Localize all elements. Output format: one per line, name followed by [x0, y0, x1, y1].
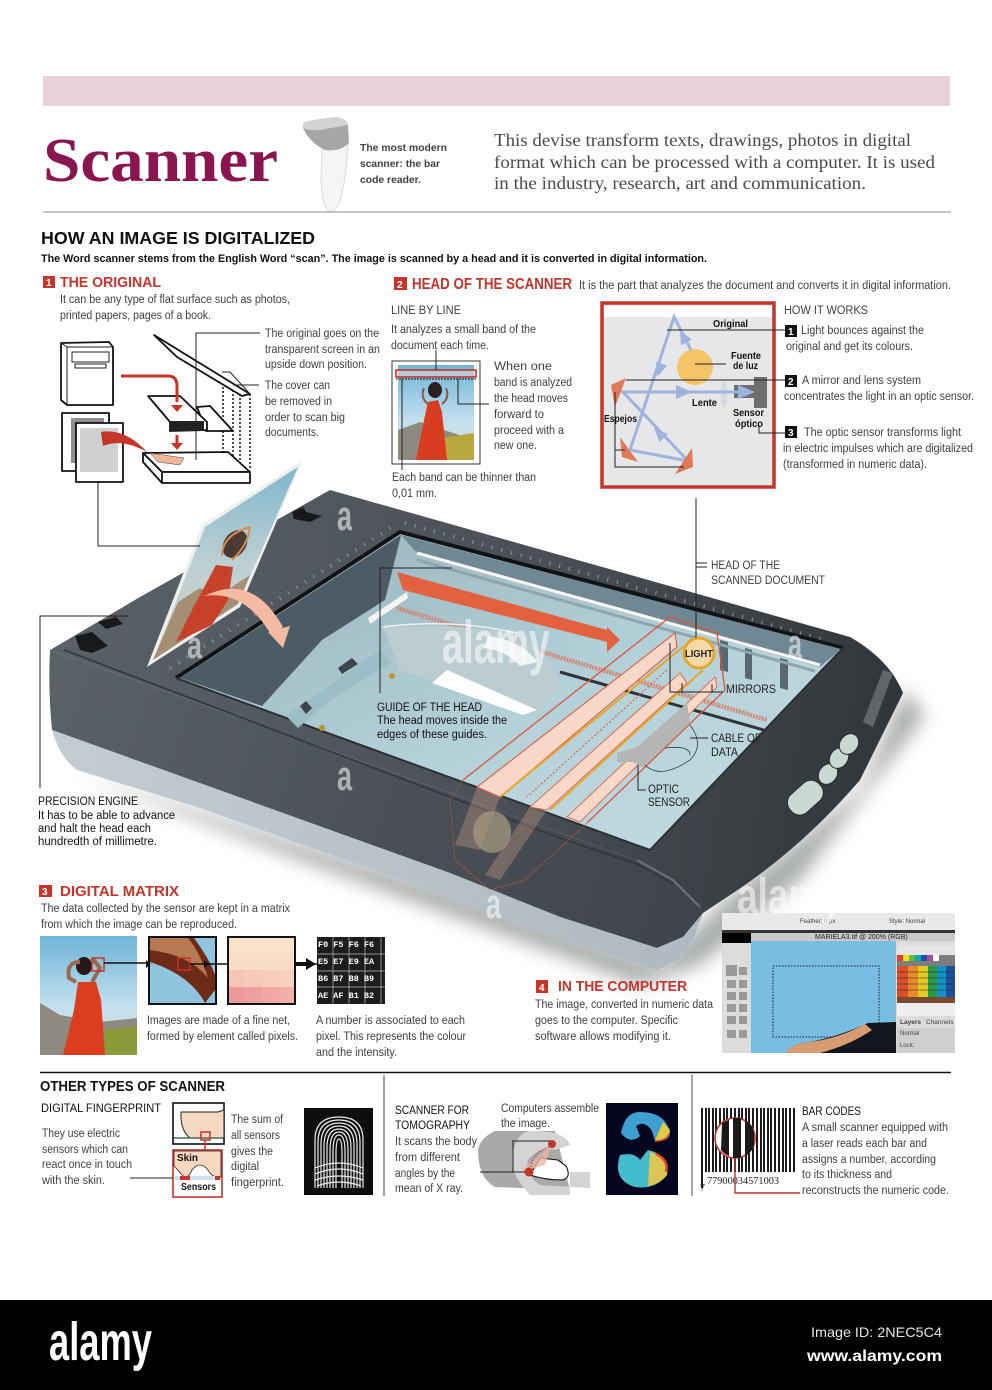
- leader: original to sheet: [98, 482, 200, 546]
- band notes: new one.: [494, 440, 537, 452]
- watermarks: a: [486, 880, 501, 927]
- heading: other types of scanner: OTHER TYPES OF SCANNER: [40, 1079, 225, 1095]
- line by line text: LINE BY LINE: [391, 305, 461, 317]
- panel: scanner photograph: [49, 490, 925, 985]
- how it works text: Light bounces against the: [801, 325, 924, 337]
- barcode graphic: 77900034571003: [707, 1176, 779, 1187]
- pixel captions: formed by element called pixels.: [147, 1031, 298, 1043]
- panel: tomography: [395, 1103, 678, 1195]
- sum text: digital: [231, 1161, 259, 1173]
- line by line text: It analyzes a small band of the: [391, 324, 536, 336]
- heading: how an image is digitalized: The Word scanner stems from the English Word “scan”. The image is scanned by a head and it is converted in digital information.: [41, 253, 707, 265]
- labels: Lente: [692, 398, 717, 409]
- tomography text: [395, 1103, 599, 1195]
- labels: [604, 319, 764, 430]
- fingerprint text: [41, 1103, 161, 1187]
- light beams: [450, 617, 725, 890]
- software screenshot: Style: Normal: [889, 919, 925, 925]
- intro text: This devise transform texts, drawings, photos in digital: [494, 130, 911, 150]
- thumbnail with scan band: [392, 350, 489, 470]
- band notes: the head moves: [494, 393, 568, 405]
- labels: óptico: [735, 419, 763, 430]
- callout: optic sensor: OPTIC: [648, 784, 679, 796]
- description: The image, converted in numeric data: [535, 999, 714, 1011]
- buttons: [783, 730, 863, 820]
- watermarks: alamy: [737, 868, 842, 924]
- intro text: format which can be processed with a computer. It is used: [494, 152, 935, 172]
- callout: light: LIGHT: [685, 649, 713, 660]
- how it works text: (transformed in numeric data).: [783, 459, 927, 471]
- pixel captions: and the intensity.: [316, 1047, 397, 1059]
- how it works text: [783, 305, 974, 471]
- peach curved arrow: [205, 589, 283, 636]
- callout: head of the scanned document: SCANNED DOCUMENT: [711, 575, 825, 587]
- line by line text: [391, 305, 536, 352]
- panel: bar codes: [700, 1106, 949, 1197]
- sensors box: Sensors: [181, 1182, 216, 1193]
- description: software allows modifying it.: [535, 1031, 671, 1043]
- tomography text: Computers assemble: [501, 1103, 599, 1115]
- diagram: light path: [602, 303, 787, 487]
- title: Scanner: [43, 127, 278, 195]
- hex matrix: B6 B7 B8 B9: [318, 974, 374, 984]
- badge 2: 2: [397, 280, 403, 291]
- watermarks: a: [788, 620, 802, 667]
- optic sensor block: [617, 703, 690, 768]
- band notes: [392, 361, 572, 500]
- watermarks: a: [187, 625, 203, 667]
- callout: cable of data: CABLE OF: [711, 733, 761, 745]
- note text: upside down position.: [265, 359, 367, 371]
- pixel captions: Images are made of a fine net,: [147, 1015, 290, 1027]
- sensor: [734, 377, 767, 408]
- heading: THE ORIGINAL: [60, 274, 161, 291]
- callout: optic sensor: SENSOR: [648, 797, 690, 809]
- header band: [43, 76, 950, 106]
- band notes: band is analyzed: [494, 377, 572, 389]
- description: from which the image can be reproduced.: [41, 919, 237, 931]
- footer logo: alamy: [49, 1312, 152, 1372]
- footer bar: [0, 1300, 992, 1390]
- pixel captions: A number is associated to each: [316, 1015, 465, 1027]
- callout: cable of data: DATA: [711, 747, 738, 759]
- rack line: [397, 608, 767, 720]
- icon: bar code reader: [303, 117, 349, 211]
- description: [41, 903, 290, 931]
- badge 4: [536, 980, 548, 994]
- pixels box: [228, 937, 295, 1004]
- light circle: [684, 638, 714, 668]
- color swatches: Channels: [926, 1019, 954, 1026]
- barcode graphic: 7: [700, 1183, 705, 1194]
- bar codes text: to its thickness and: [802, 1169, 892, 1181]
- note text: be removed in: [265, 396, 332, 408]
- metal scoop: [383, 626, 560, 713]
- fingerprint text: They use electric: [42, 1128, 120, 1140]
- band notes: Each band can be thinner than: [392, 472, 536, 484]
- description: [60, 294, 290, 322]
- note text: transparent screen in an: [265, 344, 380, 356]
- notches: [292, 507, 322, 522]
- caption: bar code reader: code reader.: [360, 174, 421, 186]
- caption: bar code reader: [360, 142, 447, 186]
- color swatches: Lock:: [900, 1043, 915, 1049]
- rule above other types: [40, 1072, 951, 1074]
- bar codes text: A small scanner equipped with: [802, 1122, 948, 1134]
- callout: head of the scanned document: HEAD OF THE: [711, 560, 780, 572]
- software screenshot: Feather: 0 px: [800, 919, 835, 925]
- sensors box: [173, 1150, 222, 1197]
- watermarks: a: [337, 492, 352, 539]
- tomography machine: [478, 1131, 590, 1195]
- note text: The original goes on the: [265, 328, 379, 340]
- fingerprint image: [304, 1108, 373, 1195]
- how it works text: concentrates the light in an optic sensor.: [784, 391, 974, 403]
- tool palette: [726, 965, 747, 1038]
- band notes: When one: [494, 361, 552, 373]
- icon: scanner exploded view: [121, 333, 260, 483]
- description: It is the part that analyzes the document and converts it in digital information.: [579, 280, 951, 292]
- description: [535, 999, 714, 1043]
- light source: [677, 349, 713, 385]
- band notes: forward to: [494, 409, 544, 421]
- leaders: [615, 330, 787, 467]
- front panel: [49, 650, 703, 948]
- finger box: [173, 1103, 224, 1150]
- heading: IN THE COMPUTER: [558, 978, 687, 995]
- description: It can be any type of flat surface such as photos,: [60, 294, 290, 306]
- how it works text: original and get its colours.: [786, 341, 913, 353]
- callout: precision engine: and halt the head each: [38, 823, 151, 835]
- description: The data collected by the sensor are kept in a matrix: [41, 903, 290, 915]
- fingerprint text: with the skin.: [41, 1175, 105, 1187]
- how it works text: HOW IT WORKS: [784, 305, 868, 317]
- head mirrors bracket: [670, 498, 723, 692]
- section 2: head of the scanner: [391, 276, 974, 500]
- tomography text: from different: [395, 1152, 461, 1164]
- description: goes to the computer. Specific: [535, 1015, 678, 1027]
- footer image id: Image ID: 2NEC5C4: [811, 1324, 942, 1340]
- tomography text: angles by the: [395, 1168, 455, 1180]
- heading: DIGITAL MATRIX: [60, 883, 179, 900]
- window front edge: [176, 648, 843, 850]
- icon: papers: [62, 413, 147, 482]
- how it works text: 3: [788, 428, 794, 439]
- note text: The cover can: [265, 380, 330, 392]
- rays: [623, 317, 750, 461]
- lens: [720, 381, 728, 407]
- divider: [383, 1075, 385, 1196]
- tomography text: SCANNER FOR: [395, 1105, 469, 1117]
- callout: guide of the head: [377, 568, 507, 741]
- bar codes text: BAR CODES: [802, 1106, 861, 1118]
- bar codes text: [802, 1106, 949, 1197]
- callout: precision engine: hundredth of millimetre.: [38, 836, 157, 848]
- description: printed papers, pages of a book.: [60, 310, 211, 322]
- barcode graphic: [700, 1108, 800, 1194]
- footer url: www.alamy.com: [806, 1348, 942, 1365]
- pixel captions: pixel. This represents the colour: [316, 1031, 466, 1043]
- color swatches: [897, 945, 955, 1053]
- tomography text: the image.: [501, 1118, 550, 1130]
- callout: mirrors: MIRRORS: [726, 684, 776, 696]
- how it works text: The optic sensor transforms light: [804, 427, 962, 439]
- heading: how an image is digitalized: HOW AN IMAGE IS DIGITALIZED: [41, 228, 315, 248]
- ruler ticks: [405, 523, 825, 640]
- color swatches: Normal: [900, 1031, 919, 1037]
- sum text: gives the: [231, 1146, 273, 1158]
- watermarks: alamy: [442, 609, 550, 676]
- sum text: The sum of: [231, 1114, 284, 1126]
- guide plate: [286, 650, 392, 728]
- callout: precision engine: [38, 616, 175, 848]
- labels: Original: [713, 319, 748, 330]
- how it works text: 1: [788, 327, 794, 338]
- software screenshot: [722, 913, 955, 1053]
- how it works text: 2: [788, 377, 794, 388]
- color swatches: Layers: [900, 1019, 921, 1026]
- badge 3: 3: [42, 887, 48, 898]
- bar codes text: reconstructs the numeric code.: [802, 1185, 949, 1197]
- sensors box: Skin: [177, 1153, 198, 1164]
- badge 1: 1: [46, 278, 52, 289]
- top surface: [50, 490, 903, 913]
- tomography text: TOMOGRAPHY: [395, 1120, 470, 1132]
- watermarks: a: [337, 752, 352, 799]
- section 4: in the computer: [535, 913, 955, 1053]
- badge 4: 4: [539, 983, 545, 994]
- labels: Sensor: [733, 408, 764, 419]
- display strip: [863, 670, 893, 727]
- section 1: the original: [43, 274, 380, 483]
- note text: order to scan big: [265, 412, 345, 424]
- labels: Espejos: [604, 414, 637, 425]
- divider: [691, 1075, 693, 1196]
- pixel captions: [147, 1015, 466, 1059]
- tomography text: It scans the body: [395, 1136, 477, 1148]
- hex matrix: E5 E7 E9 EA: [318, 957, 375, 967]
- icon: book: [61, 342, 113, 405]
- dark left wall: [180, 535, 401, 706]
- sum text: all sensors: [231, 1130, 280, 1142]
- big head-direction arrow: [397, 572, 620, 652]
- faint beams over body: [450, 780, 587, 890]
- bar codes text: assigns a number, according: [802, 1154, 936, 1166]
- back strip: [401, 535, 841, 667]
- panel: digital fingerprint: [41, 1103, 373, 1197]
- heading: HEAD OF THE SCANNER: [412, 276, 572, 293]
- hex matrix: AE AF B1 B2: [318, 991, 374, 1001]
- landscape on sheet: [153, 575, 250, 660]
- callout: head of the scanned document: [696, 560, 825, 587]
- how it works text: in electric impulses which are digitalized: [783, 443, 973, 455]
- badge 3: [39, 885, 52, 898]
- photo of woman: [40, 936, 137, 1055]
- bar codes text: a laser reads each bar and: [802, 1138, 927, 1150]
- band notes: proceed with a: [494, 425, 565, 437]
- fingerprint text: DIGITAL FINGERPRINT: [41, 1103, 161, 1115]
- badge 2: [394, 277, 407, 291]
- front rail highlight: [64, 650, 673, 884]
- intro text: [494, 130, 935, 193]
- woman on sheet: [176, 525, 253, 642]
- callout: guide of the head: The head moves inside the: [377, 715, 507, 727]
- white label: [368, 592, 408, 624]
- how it works text: A mirror and lens system: [802, 375, 921, 387]
- callout: precision engine: It has to be able to advance: [38, 810, 175, 822]
- mirrors: [611, 378, 693, 474]
- caption: bar code reader: scanner: the bar: [360, 158, 440, 170]
- section 3: digital matrix: [39, 883, 466, 1059]
- caption: bar code reader: The most modern: [360, 142, 447, 154]
- heading: how an image is digitalized: [41, 228, 707, 265]
- glass window: [176, 532, 843, 850]
- hex matrix: [317, 937, 385, 1004]
- fingerprint text: sensors which can: [42, 1144, 128, 1156]
- callout: precision engine: PRECISION ENGINE: [38, 796, 138, 808]
- labels: de luz: [733, 361, 758, 372]
- band notes: 0,01 mm.: [392, 488, 437, 500]
- back rail: [417, 553, 820, 665]
- zoomed skin box: [149, 937, 216, 1004]
- callout: optic sensor: [638, 765, 690, 809]
- badge 1: [43, 276, 55, 289]
- CT image: [606, 1103, 678, 1195]
- fingerprint text: react once in touch: [42, 1159, 132, 1171]
- scanner shadow: [75, 690, 925, 985]
- magnifier: [715, 1118, 755, 1158]
- line by line text: document each time.: [391, 340, 489, 352]
- watermarks: [187, 492, 842, 927]
- note text: [265, 328, 380, 439]
- labels: Fuente: [731, 351, 761, 362]
- hex matrix: F0 F5 F6 F6: [318, 940, 374, 950]
- photo sheet being placed: [147, 460, 303, 667]
- sum text: fingerprint.: [231, 1177, 284, 1189]
- note text: documents.: [265, 427, 319, 439]
- arrows between boxes: [104, 958, 317, 970]
- tomography text: mean of X ray.: [395, 1183, 463, 1195]
- callout: guide of the head: edges of these guides.: [377, 729, 487, 741]
- image canvas: [751, 941, 896, 1053]
- intro text: in the industry, research, art and communication.: [494, 173, 866, 193]
- sum text: [231, 1114, 284, 1189]
- callout: cable of data: [690, 733, 761, 759]
- callout: guide of the head: GUIDE OF THE HEAD: [377, 702, 482, 714]
- light lower band: [52, 730, 703, 970]
- software screenshot: MARIELA3.tif @ 200% (RGB): [815, 934, 908, 941]
